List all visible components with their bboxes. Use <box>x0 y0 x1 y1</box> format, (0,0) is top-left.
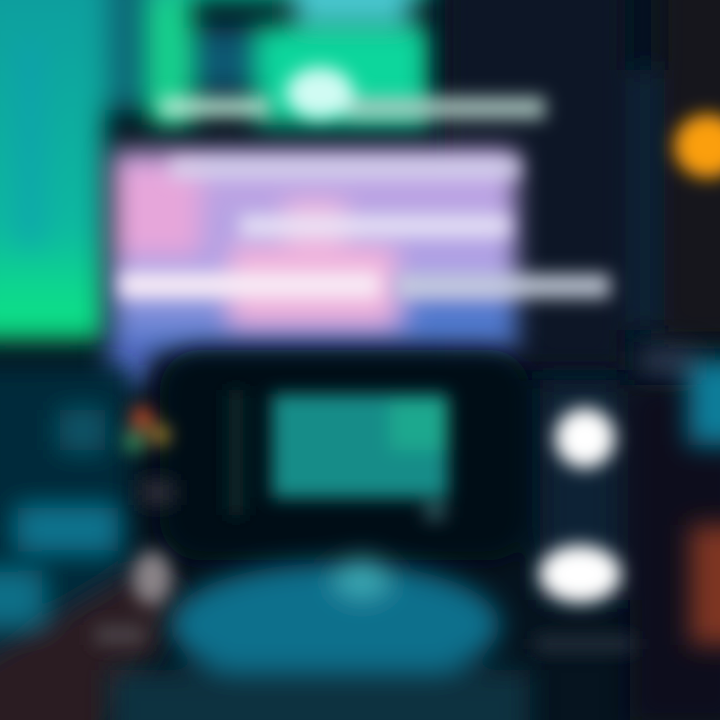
icon: multicolour app icon <box>124 407 169 452</box>
panel: lilac headline panel <box>108 150 517 385</box>
icon: small grey marks <box>95 480 175 645</box>
panel: central phone device <box>160 350 720 720</box>
panel: right edge accents <box>640 350 720 645</box>
icon: white circle button <box>555 408 615 468</box>
panel: bottom teal dome <box>110 558 530 720</box>
icon: white oval button <box>535 545 635 651</box>
panel: lower-left teal area <box>0 365 190 720</box>
icon: orange glow <box>674 114 720 178</box>
panel: top-left green block <box>0 0 435 340</box>
panel: right dark column <box>445 0 720 370</box>
panel: phone screen <box>228 390 448 519</box>
heading: blurred title lines <box>120 67 610 298</box>
